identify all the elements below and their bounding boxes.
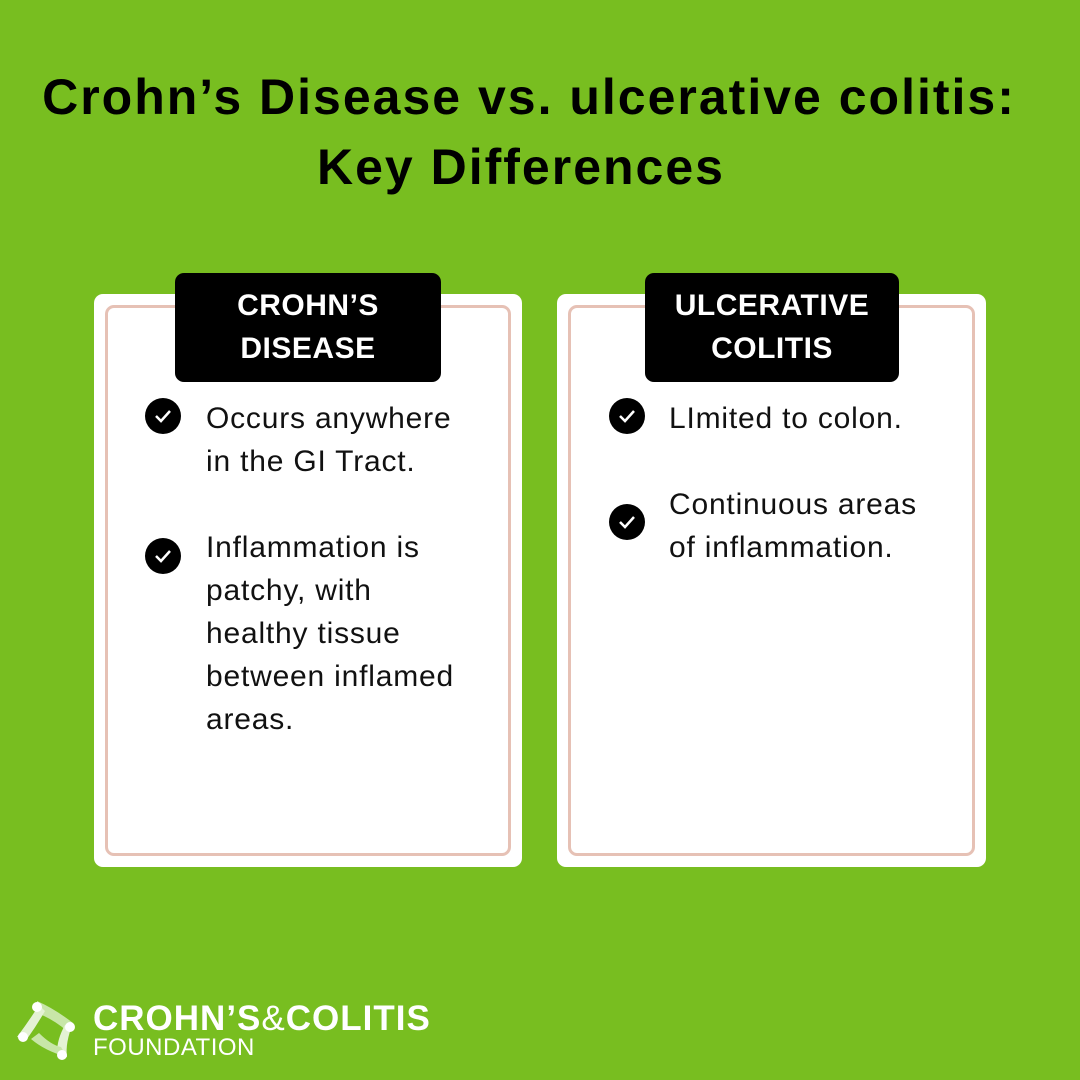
- title: Crohn’s Disease vs. ulcerative colitis:: [42, 69, 1016, 125]
- icon: check 3: [609, 398, 645, 434]
- title: [42, 69, 1016, 195]
- label: ulcerative colitis: COLITIS: [711, 332, 833, 365]
- logo: FOUNDATION: [93, 1034, 255, 1061]
- text: patchy inflammation: areas.: [206, 703, 294, 736]
- label: ulcerative colitis: ULCERATIVE: [675, 289, 869, 322]
- text: occurs anywhere: in the GI Tract.: [206, 445, 416, 478]
- text: patchy inflammation: Inflammation is: [206, 531, 420, 564]
- text: continuous areas: of inflammation.: [669, 531, 894, 564]
- icon: check 2: [145, 538, 181, 574]
- text: patchy inflammation: healthy tissue: [206, 617, 401, 650]
- text: patchy inflammation: patchy, with: [206, 574, 372, 607]
- text: continuous areas: Continuous areas: [669, 488, 917, 521]
- icon: check 1: [145, 398, 181, 434]
- label: crohn's disease: [175, 273, 441, 382]
- text: patchy inflammation: between inflamed: [206, 660, 454, 693]
- panel: ulcerative colitis: [557, 294, 986, 867]
- panel: crohn's disease: [94, 294, 522, 867]
- label: crohn's disease: DISEASE: [240, 332, 376, 365]
- text: patchy inflammation: [206, 531, 454, 736]
- label: crohn's disease: CROHN’S: [237, 289, 379, 322]
- text: logo wordmark: CROHN’S&COLITIS: [93, 999, 431, 1038]
- label: ulcerative colitis: [645, 273, 899, 382]
- icon: logo mark: [17, 1001, 75, 1060]
- logo: [17, 999, 431, 1061]
- icon: check 4: [609, 504, 645, 540]
- text: limited to colon: LImited to colon.: [669, 402, 903, 435]
- text: occurs anywhere: [206, 402, 451, 478]
- text: continuous areas: [669, 488, 917, 564]
- title: Key Differences: [317, 139, 725, 195]
- text: occurs anywhere: Occurs anywhere: [206, 402, 451, 435]
